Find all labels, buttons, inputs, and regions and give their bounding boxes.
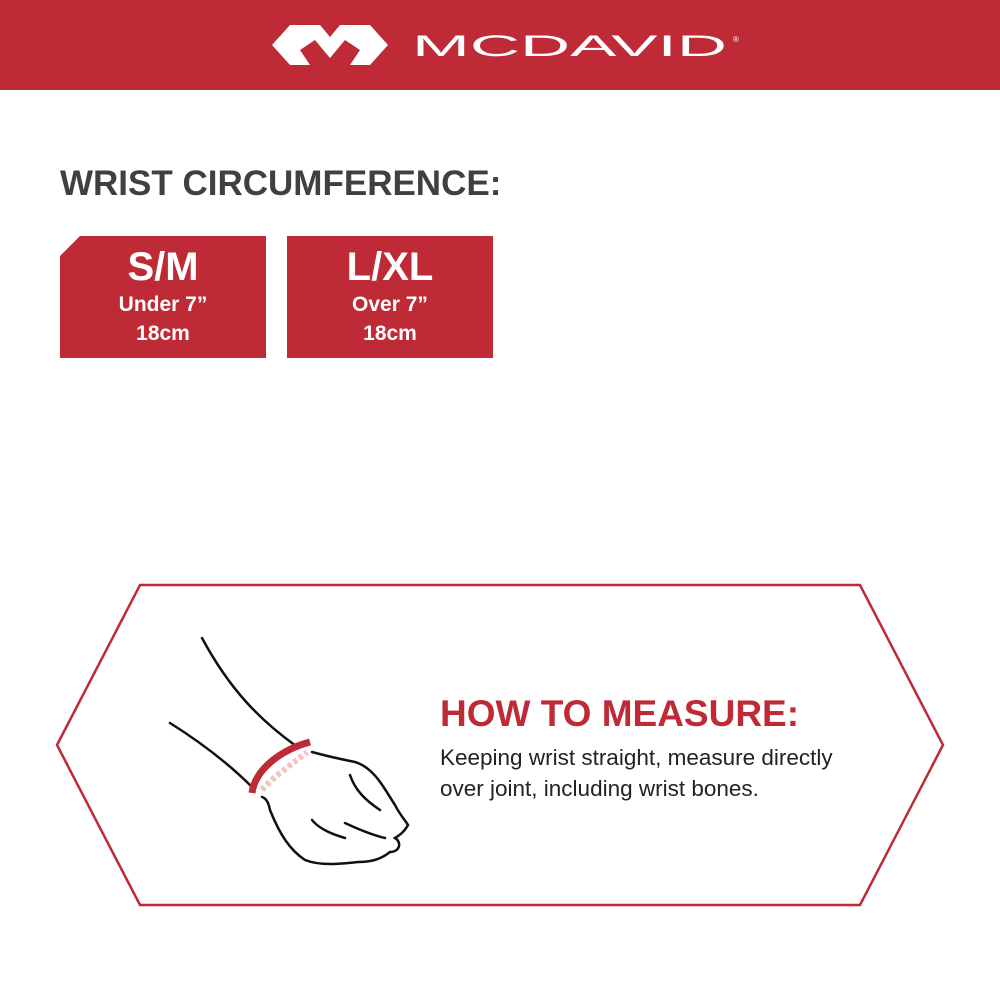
- logo: MCDAVID: [412, 30, 727, 63]
- icon: wrist: [170, 638, 408, 864]
- size box S/M: 18cm: [136, 322, 190, 345]
- size box L/XL: Over 7”: [352, 293, 428, 316]
- text: instructions: over joint, including wrist bones.: [440, 776, 759, 801]
- heading: how to measure: HOW TO MEASURE:: [440, 693, 799, 734]
- size box S/M: [60, 236, 266, 358]
- logo: [272, 25, 739, 65]
- size box S/M: S/M: [127, 245, 199, 289]
- logo: ®: [733, 35, 739, 44]
- header bar: [0, 0, 1000, 90]
- size box S/M: Under 7”: [119, 293, 207, 316]
- text: instructions: Keeping wrist straight, measure directly: [440, 745, 833, 770]
- size box L/XL: 18cm: [363, 322, 417, 345]
- text: instructions: [440, 745, 833, 801]
- size box L/XL: L/XL: [347, 245, 433, 289]
- size box L/XL: [287, 236, 493, 358]
- title: WRIST CIRCUMFERENCE:: [60, 164, 501, 203]
